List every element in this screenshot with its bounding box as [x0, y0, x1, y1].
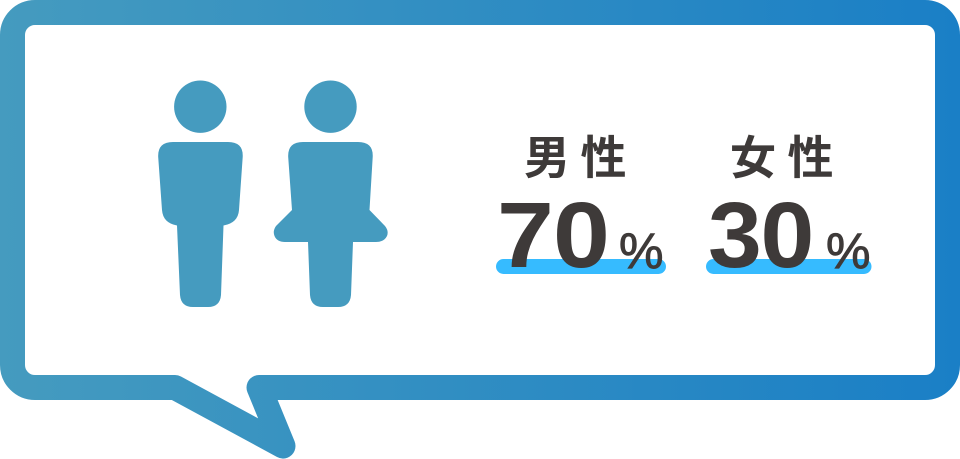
label: female: 女 [730, 132, 776, 184]
label: female [730, 132, 834, 184]
icon: male figure [158, 80, 243, 307]
stat: male 70% [497, 183, 663, 287]
icon: female figure [274, 80, 388, 307]
stat: female 30%: % [826, 223, 870, 279]
stat: female 30% [708, 184, 870, 288]
label: male: 男 [524, 132, 570, 184]
underline: male value [496, 259, 666, 274]
label: male: 性 [580, 132, 626, 184]
label: female: 性 [788, 132, 834, 184]
label: male [524, 132, 626, 184]
stat: male 70%: 70 [497, 183, 610, 287]
stat: female 30%: 30 [708, 184, 814, 288]
underline: female value [706, 259, 872, 274]
stat: male 70%: % [619, 223, 663, 279]
